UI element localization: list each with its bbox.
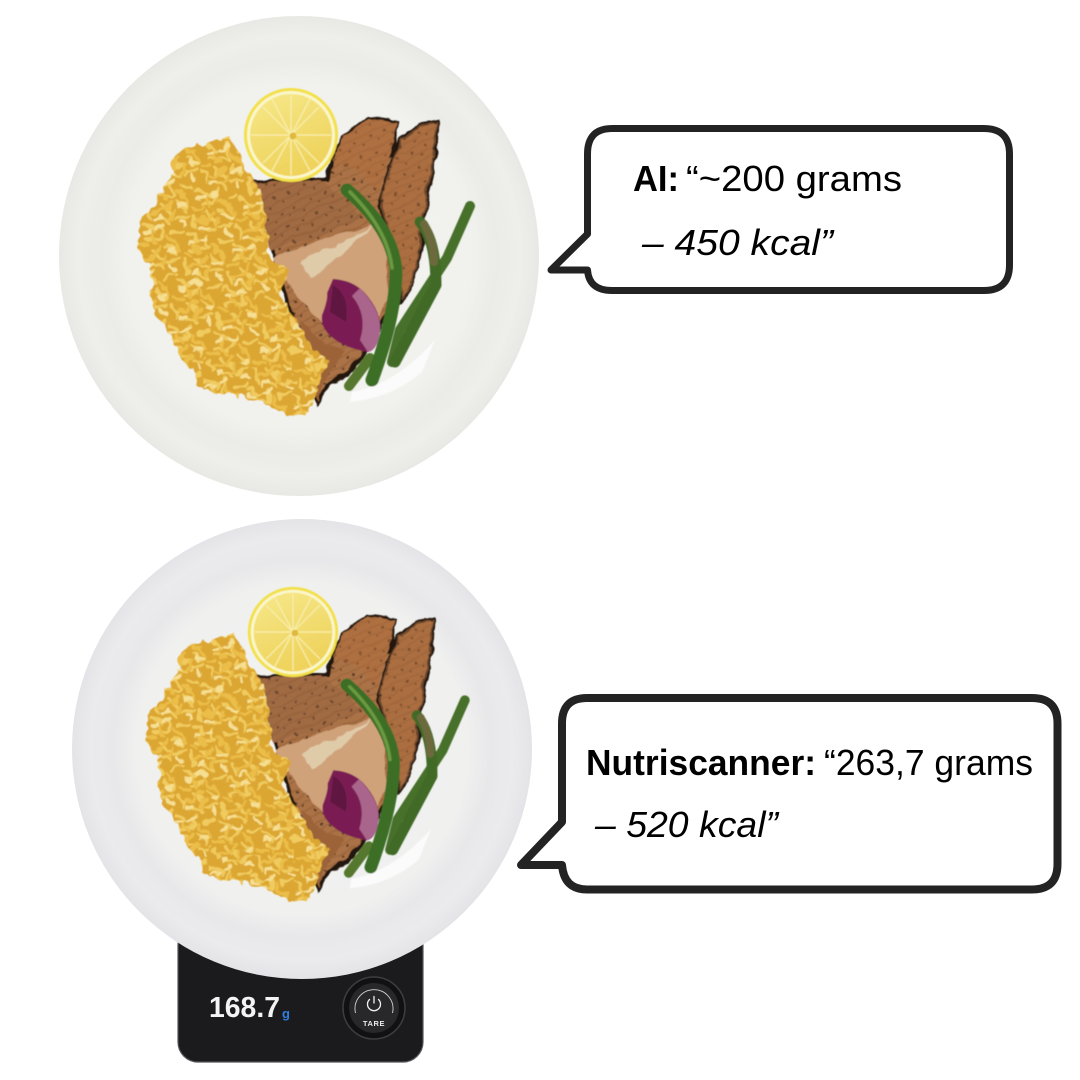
fish fillets (253, 118, 437, 403)
radicchio leaf (322, 279, 380, 352)
callout text: AI calories: – 450 kcal” (641, 222, 835, 263)
scale: display base (178, 925, 423, 1062)
tare button (343, 977, 405, 1039)
callout text: Nutriscanner: Nutriscanner: (586, 742, 816, 783)
rice (138, 137, 327, 417)
callout text: AI: “~200 grams (686, 158, 902, 199)
tare button: TARE (363, 1019, 385, 1028)
callout text: Nutriscanner calories: – 520 kcal” (594, 804, 780, 845)
callout text: AI: AI: (633, 158, 679, 199)
plate: Nutriscanner estimate (72, 519, 532, 979)
lemon slice (244, 88, 338, 182)
scale unit: g (282, 1006, 290, 1021)
callout: Nutriscanner estimate (521, 698, 1058, 890)
scale reading: 168.7 (209, 992, 280, 1024)
plate highlight (350, 340, 435, 402)
food on weighed plate (146, 587, 465, 903)
asparagus spears (347, 190, 470, 386)
callout text: Nutriscanner: “263,7 grams (824, 742, 1033, 783)
food: rice, fish, lemon, asparagus (138, 88, 470, 417)
plate: AI estimate (59, 16, 539, 496)
callout: AI estimate (551, 128, 1010, 290)
